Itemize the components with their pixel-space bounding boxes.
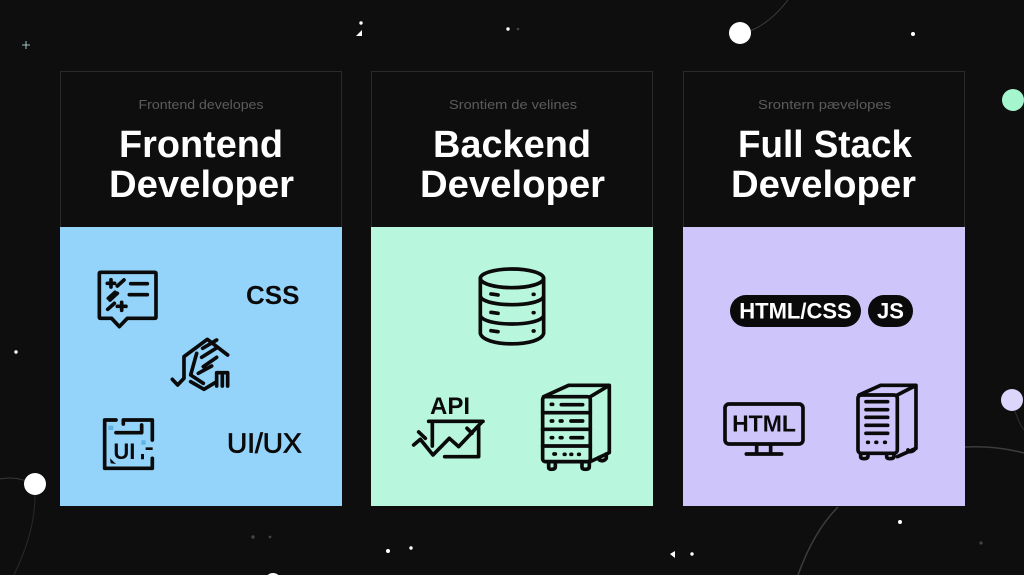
- icon: server tower: [858, 385, 916, 459]
- backend subtitle: Srontiem de velines: [449, 97, 578, 112]
- frontend heading: [109, 124, 294, 206]
- icon: UI frame: UI: [113, 439, 135, 464]
- CSS label: CSS: [246, 280, 299, 310]
- pill: JS: JS: [877, 298, 904, 324]
- icon: JS stack: [172, 339, 228, 389]
- panel: frontend developer: [60, 72, 342, 506]
- pill: HTML/CSS: HTML/CSS: [739, 298, 852, 324]
- icon: server rack: [543, 385, 609, 469]
- backend heading: Developer: [420, 164, 605, 206]
- pill: HTML/CSS: [730, 295, 861, 327]
- full stack subtitle: Srontern pævelopes: [758, 97, 892, 112]
- icon: chat checklist: [99, 272, 156, 327]
- backend heading: Backend: [433, 124, 591, 166]
- full stack heading: Full Stack: [738, 124, 913, 166]
- panel: backend developer: [371, 72, 653, 506]
- frontend colour block: [60, 227, 342, 506]
- backend colour block: [371, 227, 653, 506]
- pill: JS: [868, 295, 913, 327]
- frontend heading: Developer: [109, 164, 294, 206]
- full stack heading: [731, 124, 916, 206]
- API label: API: [430, 393, 470, 420]
- backend heading: [420, 124, 605, 206]
- frontend subtitle: Frontend developes: [138, 97, 264, 112]
- full stack colour block: [683, 227, 965, 506]
- icon: HTML monitor: [725, 404, 803, 454]
- icon: UI frame: [105, 420, 153, 468]
- icon: database: [480, 269, 544, 344]
- full stack heading: Developer: [731, 164, 916, 206]
- panel: full stack developer: [683, 72, 965, 506]
- icon: API chart: [414, 421, 483, 457]
- UI/UX label: UI/UX: [227, 428, 302, 458]
- icon: HTML monitor: HTML: [732, 411, 796, 437]
- frontend heading: Frontend: [119, 124, 283, 166]
